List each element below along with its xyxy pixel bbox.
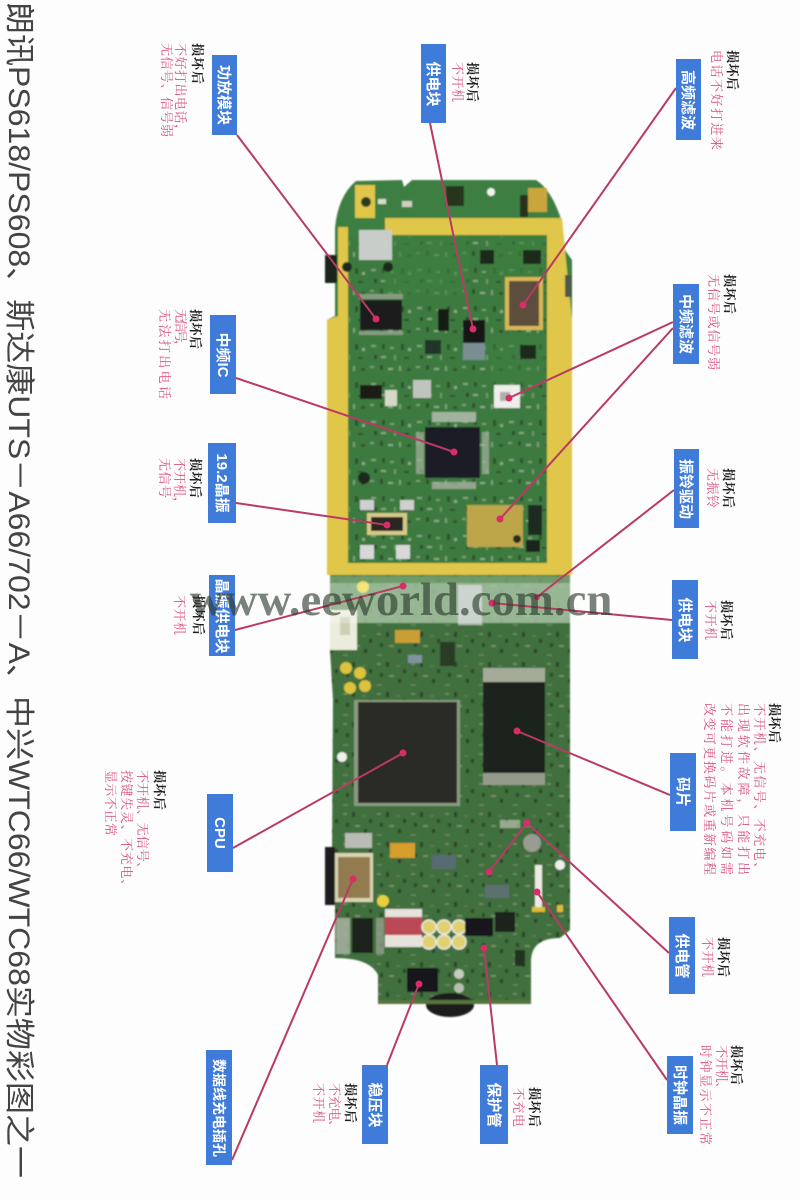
caption: 供电块 top: 损坏后 xyxy=(465,62,480,102)
white haze band across the hinge xyxy=(330,583,570,623)
label: 晶振供电块 xyxy=(209,575,235,656)
upper board: RF section xyxy=(325,180,572,575)
label: CPU xyxy=(207,794,233,872)
caption: 中频滤波 xyxy=(706,274,737,370)
caption: 时钟晶振: 不开机、 xyxy=(714,1045,729,1095)
watermark: www.eeworld.com.cn xyxy=(190,574,612,626)
caption: 时钟晶振 xyxy=(698,1045,744,1145)
caption: 19.2晶振 xyxy=(157,458,203,510)
caption: 供电块 right: 不开机 xyxy=(703,600,718,640)
line and dot: 振铃驱动 xyxy=(534,490,674,600)
label: 供电块 top: 供电块 xyxy=(424,61,441,107)
caption: 中频IC: 无法打出电话 xyxy=(157,309,172,399)
label: 振铃驱动 xyxy=(674,449,699,528)
caption: 19.2晶振: 损坏后 xyxy=(188,458,203,498)
caption: 供电块 right: 损坏后 xyxy=(719,600,734,640)
caption: 功放模块: 不好打出电话， xyxy=(172,43,188,137)
lines and dots: 供电管 xyxy=(486,820,669,953)
caption: CPU: 不开机、无信号、 xyxy=(135,770,150,875)
lower board: baseband section xyxy=(325,575,570,1017)
caption: CPU: 按键失灵、不充电、 xyxy=(119,770,134,892)
label: 稳压块: 稳压块 xyxy=(366,1082,384,1128)
label: 码片: 码片 xyxy=(674,777,691,807)
label: 中频IC: 中频IC xyxy=(214,332,231,378)
lines and dots: 中频滤波 xyxy=(496,322,673,522)
label: 供电块 right: 供电块 xyxy=(676,597,693,643)
line and dot: 稳压块 xyxy=(387,980,422,1065)
caption: 保护管 xyxy=(511,1087,542,1127)
circuit board photo xyxy=(325,180,572,1017)
label: 19.2晶振: 19.2晶振 xyxy=(213,453,231,513)
label: 稳压块 xyxy=(362,1065,388,1144)
caption: 供电管: 不开机 xyxy=(700,937,715,977)
caption: 稳压块 xyxy=(311,1083,358,1133)
label: 高频滤波: 高频滤波 xyxy=(679,70,697,130)
label: 供电块 top xyxy=(421,44,446,123)
line and dot: 晶振供电块 xyxy=(235,582,406,630)
caption: 保护管: 不充电 xyxy=(511,1087,526,1127)
line and dot: 功放模块 xyxy=(237,135,380,322)
label: 保护管: 保护管 xyxy=(485,1082,503,1128)
caption: 振铃驱动 xyxy=(705,468,736,508)
caption: 码片: 出现软件故障，只能打出 xyxy=(735,703,751,875)
caption: 供电管 xyxy=(700,937,731,977)
caption: 供电块 right xyxy=(703,600,734,640)
label: 码片 xyxy=(670,753,696,831)
caption: 中频滤波: 无信号或信号弱 xyxy=(706,274,721,370)
label: 中频IC xyxy=(210,315,236,394)
line and dot: CPU xyxy=(233,750,406,848)
label: 高频滤波 xyxy=(676,59,701,140)
caption: 晶振供电块 xyxy=(172,595,206,635)
line and dot: 供电块 right xyxy=(488,600,672,620)
line and dot: 时钟晶振 xyxy=(534,888,667,1080)
title: 朗讯PS618/PS608、斯达康UTS－A66/702－A、中兴WTC66/WTC68实物彩图之一 xyxy=(2,2,35,1178)
caption: 供电块 top xyxy=(450,62,480,102)
caption: 高频滤波: 损坏后 xyxy=(725,50,740,90)
caption: 功放模块: 损坏后 xyxy=(190,43,205,84)
caption: 振铃驱动: 损坏后 xyxy=(721,468,736,508)
caption: 码片: 不能打进。本机号码如需 xyxy=(719,703,734,875)
line and dot: 中频IC xyxy=(236,378,458,456)
label: 时钟晶振: 时钟晶振 xyxy=(671,1065,689,1125)
label: 功放模块: 功放模块 xyxy=(215,65,233,125)
label: 供电管: 供电管 xyxy=(673,933,691,979)
caption: 中频IC xyxy=(157,309,203,399)
caption: 中频IC: 无信号， xyxy=(172,309,188,353)
caption: 码片: 损坏后 xyxy=(767,703,782,743)
label: 晶振供电块: 晶振供电块 xyxy=(213,578,231,654)
caption: 19.2晶振: 无信号 xyxy=(157,458,172,498)
line and dot: 高频滤波 xyxy=(520,88,676,308)
caption: CPU xyxy=(103,770,167,892)
caption: 晶振供电块: 损坏后 xyxy=(191,595,206,635)
label: 供电管 xyxy=(669,917,695,994)
label: 数据线充电插孔: 数据线充电插孔 xyxy=(211,1059,227,1157)
label: 功放模块 xyxy=(212,55,237,135)
caption: 码片: 不开机、无信号、不充电、 xyxy=(752,703,767,875)
caption: 晶振供电块: 不开机 xyxy=(172,595,187,635)
caption: 码片 xyxy=(702,703,782,875)
caption: 保护管: 损坏后 xyxy=(527,1087,542,1127)
label: 中频滤波 xyxy=(673,284,699,364)
caption: CPU: 损坏后 xyxy=(152,770,167,810)
label: 保护管 xyxy=(480,1065,508,1144)
caption: 中频IC: 损坏后 xyxy=(188,309,203,349)
caption: 高频滤波: 电话不好打进来 xyxy=(709,50,724,150)
label: 数据线充电插孔 xyxy=(206,1050,232,1165)
caption: 高频滤波 xyxy=(709,50,740,150)
caption: 码片: 改变可更换码片或重新编程 xyxy=(702,703,717,875)
caption: 中频滤波: 损坏后 xyxy=(722,274,737,314)
label: 供电块 right xyxy=(672,580,698,659)
caption: 稳压块: 不充电、 xyxy=(327,1083,342,1133)
line and dot: 保护管 xyxy=(480,944,497,1065)
label: CPU: CPU xyxy=(211,817,228,849)
caption: 功放模块: 无信号、信号弱 xyxy=(159,43,174,137)
caption: 供电块 top: 不开机 xyxy=(450,62,465,102)
label: 19.2晶振 xyxy=(208,443,236,523)
caption: 时钟晶振: 损坏后 xyxy=(729,1045,744,1085)
line and dot: 供电块 top xyxy=(430,123,476,332)
caption: 供电管: 损坏后 xyxy=(716,937,731,977)
label: 时钟晶振 xyxy=(667,1056,693,1134)
caption: 时钟晶振: 时钟显示不正常 xyxy=(698,1045,713,1145)
caption: 稳压块: 不开机 xyxy=(311,1083,326,1123)
caption: 稳压块: 损坏后 xyxy=(343,1083,358,1123)
label: 中频滤波: 中频滤波 xyxy=(677,294,695,354)
caption: 振铃驱动: 无振铃 xyxy=(705,468,720,508)
line and dot: 19.2晶振 xyxy=(236,503,390,528)
line and dot: 码片 xyxy=(514,728,670,795)
caption: 19.2晶振: 不开机， xyxy=(171,458,187,510)
caption: CPU: 显示不正常 xyxy=(103,770,118,836)
caption: 功放模块 xyxy=(159,43,205,137)
label: 振铃驱动: 振铃驱动 xyxy=(677,459,695,519)
line and dot: 数据线充电插孔 xyxy=(232,876,356,1160)
